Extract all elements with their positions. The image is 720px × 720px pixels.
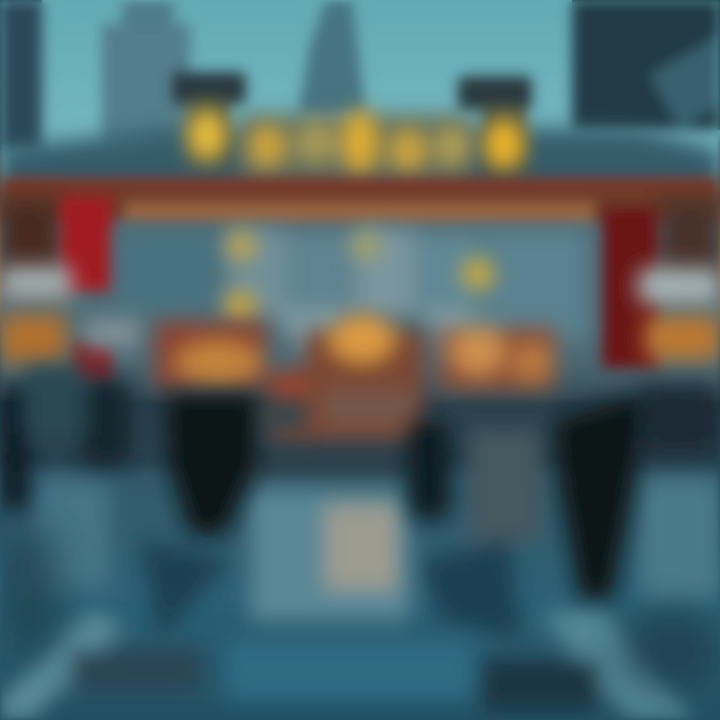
lantern caps	[172, 72, 532, 174]
central steel panels	[118, 228, 587, 360]
upper crowd band	[0, 385, 720, 475]
side walls	[0, 200, 720, 290]
white signs	[0, 266, 720, 348]
small yellow lights	[224, 231, 494, 322]
soft shadow patches	[0, 520, 720, 690]
orange shop lights	[0, 314, 720, 442]
roof band	[0, 115, 720, 195]
lantern lights	[187, 109, 524, 174]
ground reflections	[0, 430, 720, 720]
background buildings	[0, 0, 720, 150]
sky	[0, 0, 720, 200]
gate body	[0, 190, 720, 400]
red and brown beam	[0, 178, 720, 222]
red pillars	[60, 196, 658, 384]
ground	[0, 470, 720, 720]
crowd silhouettes	[0, 365, 720, 600]
